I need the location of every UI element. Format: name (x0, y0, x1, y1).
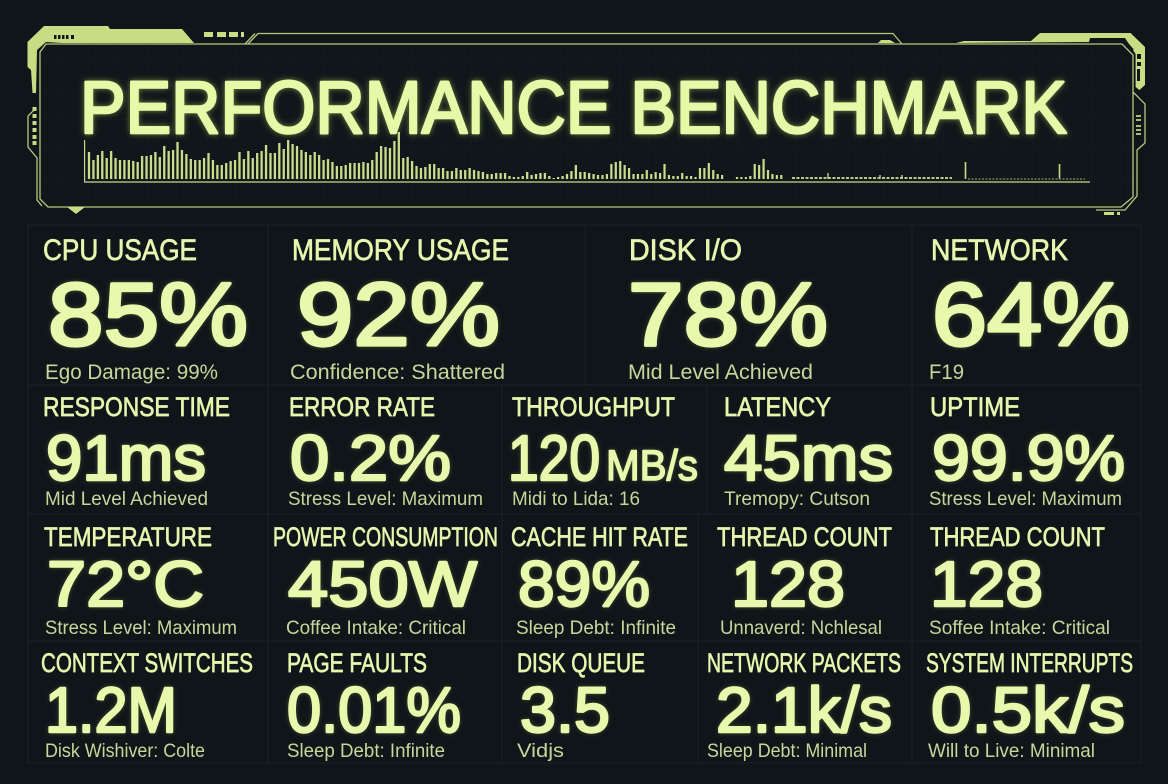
card: thread count: 128 (731, 548, 845, 620)
card: thread count 2: THREAD COUNT (930, 522, 1105, 552)
card: temperature: TEMPERATURE (44, 522, 212, 552)
card: system interrupts (912, 641, 1141, 763)
card: thread count 2 (912, 514, 1141, 641)
card: CPU usage: Ego Damage: 99% (45, 361, 218, 384)
value: 120 MB/s (508, 422, 698, 494)
header banner (28, 26, 1145, 215)
card: cache hit rate (502, 514, 698, 641)
card: response time (28, 385, 268, 514)
card: error rate: 0.2% (290, 422, 451, 494)
card: error rate: ERROR RATE (289, 392, 435, 422)
card: throughput (502, 385, 707, 514)
card: cache hit rate: Sleep Debt: Infinite (516, 617, 676, 639)
card: temperature: 72°C (47, 548, 204, 620)
card: power consumption (268, 514, 502, 641)
left edge indicator dots (32, 107, 36, 145)
card: memory usage: Confidence: Shattered (290, 361, 505, 384)
top-right corner tab (878, 33, 1145, 90)
card: page faults: 0.01% (287, 674, 461, 746)
bottom pointer (67, 207, 85, 214)
card: disk I/O: 78% (628, 264, 828, 364)
card: response time: RESPONSE TIME (43, 392, 230, 422)
card: network: 64% (932, 264, 1130, 364)
card: network packets: 2.1k/s (716, 674, 892, 746)
card: response time: 91ms (46, 422, 206, 494)
card: latency: LATENCY (724, 392, 831, 422)
card: cache hit rate: 89% (518, 548, 650, 620)
card: memory usage (268, 225, 585, 385)
card: context switches: 1.2M (45, 674, 177, 746)
waveform bar chart (85, 132, 1090, 182)
card: thread count: THREAD COUNT (717, 522, 892, 552)
value: 120 MB/s: MB/s (606, 442, 698, 490)
card: disk I/O (585, 225, 912, 385)
card: network: F19 (929, 361, 964, 384)
card: uptime: UPTIME (930, 392, 1020, 422)
card: uptime (912, 385, 1141, 514)
card: thread count 2: Soffee Intake: Critical (929, 617, 1110, 639)
metrics grid (28, 225, 1141, 763)
top dashes (204, 32, 244, 37)
card: memory usage: 92% (297, 264, 500, 364)
card: page faults (268, 641, 502, 763)
card: error rate (268, 385, 502, 514)
card: network packets: NETWORK PACKETS (707, 648, 901, 678)
card: page faults: Sleep Debt: Infinite (287, 740, 445, 762)
card: latency: 45ms (724, 422, 893, 494)
card: thread count (698, 514, 912, 641)
card: memory usage: MEMORY USAGE (292, 234, 509, 267)
card: disk I/O: DISK I/O (629, 234, 742, 267)
card: system interrupts: Will to Live: Minimal (928, 740, 1095, 762)
value: 120 MB/s: 120 (508, 422, 600, 494)
card: disk queue: DISK QUEUE (517, 648, 645, 678)
card: thread count 2: 128 (930, 548, 1043, 620)
card: uptime: Stress Level: Maximum (929, 488, 1122, 510)
card: page faults: PAGE FAULTS (287, 648, 427, 678)
card: error rate: Stress Level: Maximum (288, 488, 483, 510)
card: throughput: THROUGHPUT (512, 392, 675, 422)
card: context switches (28, 641, 268, 763)
card: network (912, 225, 1141, 385)
card: network: NETWORK (931, 234, 1068, 267)
card: latency: Tremopy: Cutson (724, 488, 870, 510)
card: temperature: Stress Level: Maximum (45, 617, 237, 639)
card: network packets: Sleep Debt: Minimal (707, 740, 867, 762)
card: network packets (698, 641, 912, 763)
card: disk queue (502, 641, 698, 763)
card: system interrupts: 0.5k/s (931, 674, 1125, 746)
right edge indicator dots (1136, 115, 1141, 135)
card: disk I/O: Mid Level Achieved (628, 361, 813, 384)
card: context switches: Disk Wishiver: Colte (45, 740, 205, 762)
bottom-right tabs (1104, 212, 1120, 215)
title: PERFORMANCE BENCHMARK (80, 66, 1067, 149)
card: CPU usage (28, 225, 268, 385)
card: power consumption: POWER CONSUMPTION (273, 522, 498, 552)
card: disk queue: 3.5 (520, 674, 610, 746)
card: response time: Mid Level Achieved (45, 488, 208, 510)
card: context switches: CONTEXT SWITCHES (41, 648, 253, 678)
card: latency (707, 385, 912, 514)
top-left corner tab (28, 26, 194, 93)
card: CPU usage: CPU USAGE (43, 234, 197, 267)
card: uptime: 99.9% (932, 422, 1125, 494)
card: power consumption: Coffee Intake: Critical (286, 617, 466, 639)
card: temperature (28, 514, 268, 641)
card: disk queue: Vidjs (517, 740, 564, 762)
card: cache hit rate: CACHE HIT RATE (511, 522, 688, 552)
banner frame (28, 34, 1145, 210)
card: power consumption: 450W (288, 548, 478, 620)
card: throughput: Midi to Lida: 16 (512, 488, 640, 510)
card: CPU usage: 85% (48, 264, 248, 364)
card: thread count: Unnaverd: Nchlesal (720, 617, 882, 639)
